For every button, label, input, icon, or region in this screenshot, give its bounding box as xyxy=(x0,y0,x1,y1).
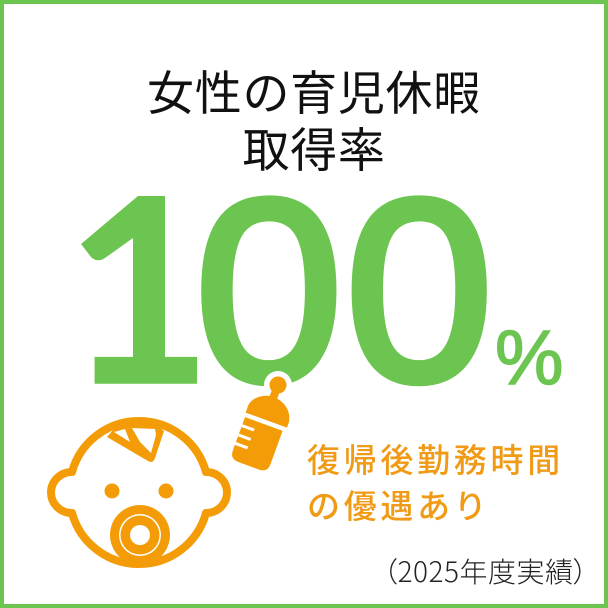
pacifier xyxy=(110,505,170,565)
callout: return-to-work benefit: の優遇あり xyxy=(307,488,490,525)
callout: return-to-work benefit: 復帰後勤務時間 xyxy=(307,442,564,479)
baby hair tuft xyxy=(107,420,164,462)
big number: 100: 1 xyxy=(81,146,205,436)
icon: baby bottle xyxy=(229,370,303,474)
baby eyes xyxy=(104,484,174,498)
percent sign: % xyxy=(495,315,563,401)
title xyxy=(147,67,481,177)
callout: return-to-work benefit xyxy=(307,442,564,525)
title: 女性の育児休暇 xyxy=(147,67,481,120)
footnote: year: （2025年度実績） xyxy=(383,551,588,591)
baby head and ears outline xyxy=(51,421,227,564)
big number: 100: 00 xyxy=(195,146,493,435)
icon: baby face xyxy=(51,420,227,565)
title: 取得率 xyxy=(242,124,386,177)
